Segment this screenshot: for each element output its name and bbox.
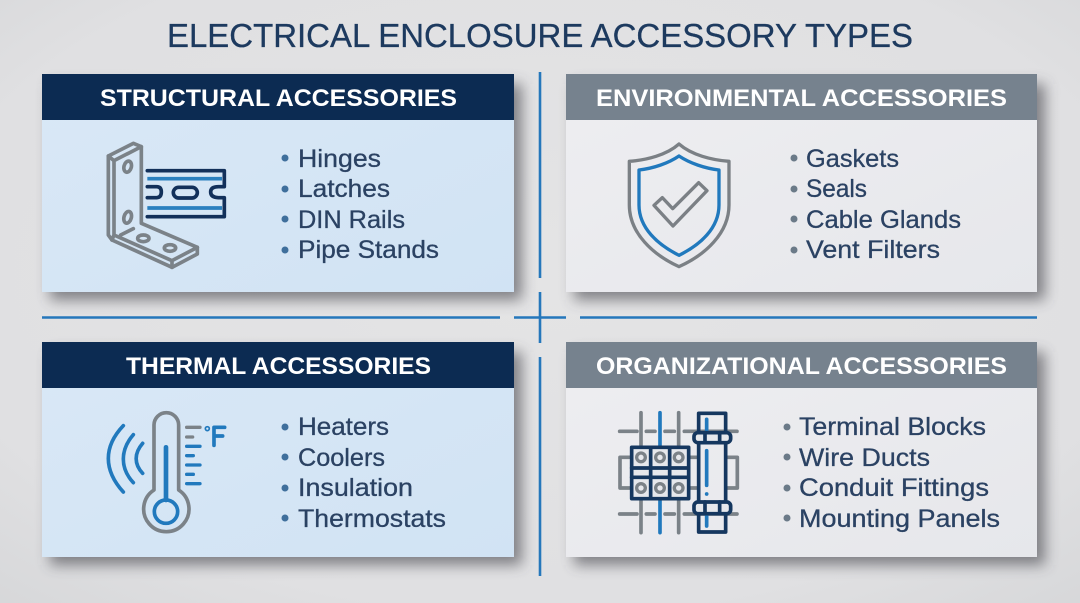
list: thermal: Heaters — [298, 413, 389, 441]
list: environmental: Seals — [806, 175, 867, 203]
icon: bracket and DIN rail — [108, 143, 224, 267]
list: environmental: Gaskets — [806, 145, 899, 173]
heading: organizational: ORGANIZATIONAL ACCESSORIES — [596, 353, 1007, 380]
list: thermal: Thermostats — [298, 505, 446, 533]
list: environmental: Vent Filters — [806, 236, 940, 264]
list: structural: Hinges — [298, 145, 381, 173]
list: thermal: Coolers — [298, 444, 385, 472]
panel: environmental accessories — [566, 74, 1045, 300]
heading: environmental: ENVIRONMENTAL ACCESSORIES — [596, 85, 1007, 112]
panel: thermal accessories — [42, 342, 522, 565]
list: thermal — [282, 413, 446, 533]
icon: thermometer — [108, 413, 225, 532]
panel: structural accessories — [42, 74, 522, 300]
heading: thermal: THERMAL ACCESSORIES — [126, 353, 431, 380]
list: environmental: Cable Glands — [806, 206, 961, 234]
list: organizational: Wire Ducts — [799, 444, 930, 472]
list: organizational: Conduit Fittings — [799, 474, 989, 502]
list: structural: DIN Rails — [298, 206, 405, 234]
list: thermal: Insulation — [298, 474, 413, 502]
heading: structural: STRUCTURAL ACCESSORIES — [100, 85, 457, 112]
header: organizational — [566, 342, 1037, 388]
cross divider — [42, 72, 1037, 576]
header: environmental — [566, 74, 1037, 120]
title: ELECTRICAL ENCLOSURE ACCESSORY TYPES — [167, 17, 913, 54]
list: structural: Latches — [298, 175, 390, 203]
list: structural: Pipe Stands — [298, 236, 439, 264]
header: structural — [42, 74, 514, 120]
panel: organizational accessories — [566, 342, 1045, 565]
list: organizational: Terminal Blocks — [799, 413, 986, 441]
icon: terminal blocks and conduit — [620, 413, 737, 533]
list: environmental — [790, 145, 961, 264]
header: thermal — [42, 342, 514, 388]
list: structural — [282, 145, 439, 264]
list: organizational — [784, 413, 1000, 533]
list: organizational: Mounting Panels — [799, 505, 1000, 533]
icon: shield with check — [629, 144, 729, 267]
